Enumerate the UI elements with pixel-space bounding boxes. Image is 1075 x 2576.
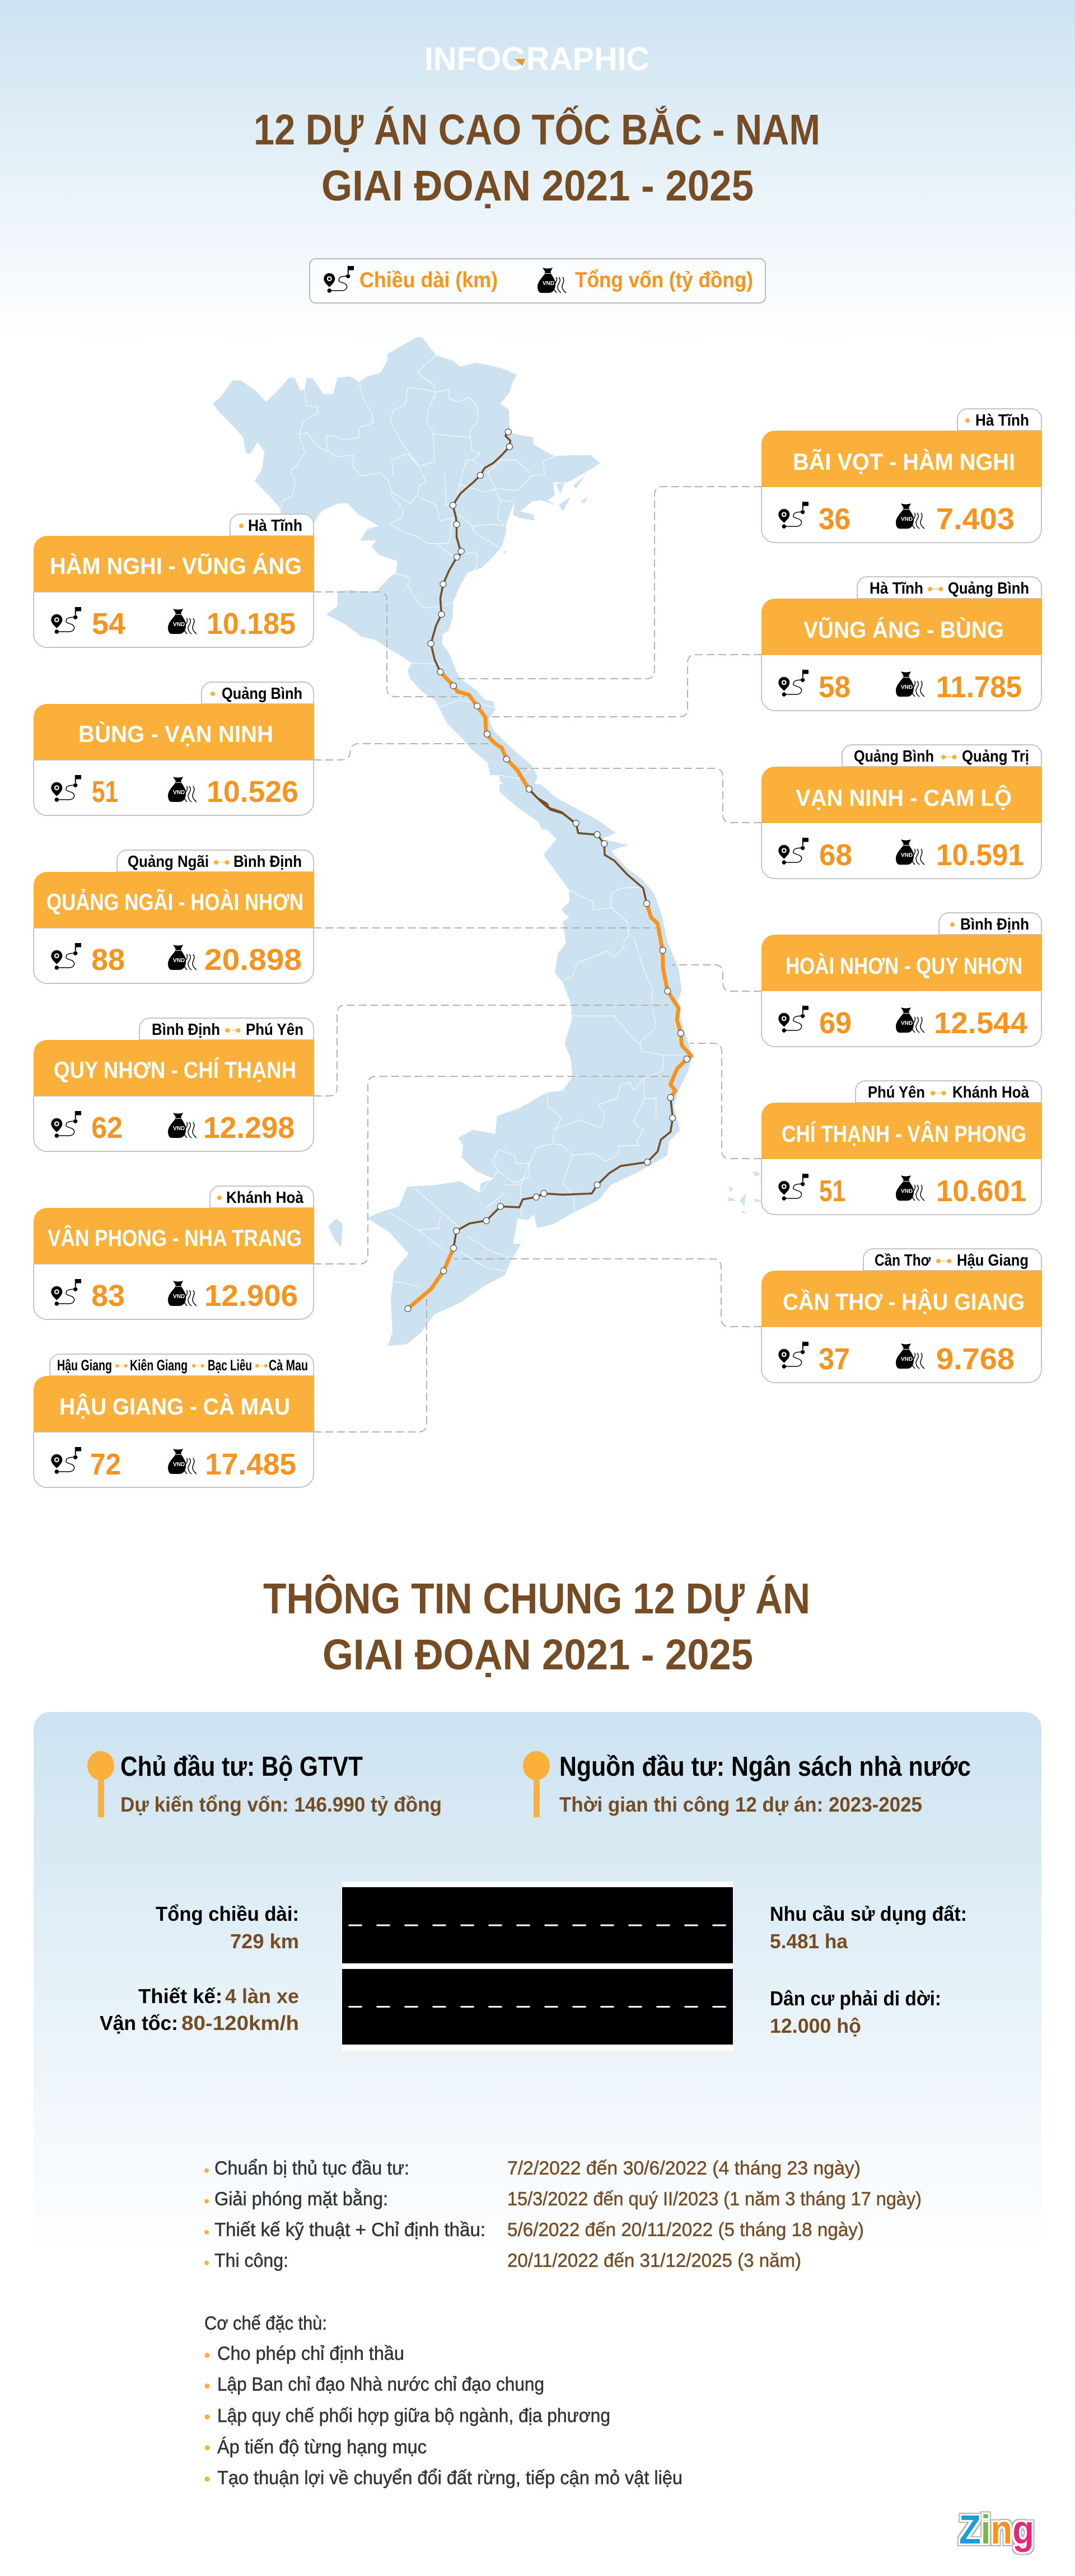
card header	[761, 431, 1042, 487]
card header	[761, 1103, 1042, 1159]
logo: Zing: Zing	[959, 2508, 1034, 2552]
location tab	[50, 1354, 314, 1376]
location tab: Bình Định	[152, 1021, 220, 1039]
capital	[896, 1174, 1026, 1208]
legend label: capital: Tổng vốn (tỷ đồng)	[575, 268, 753, 292]
card body	[761, 991, 1041, 1047]
length	[778, 1342, 850, 1376]
capital: 10.591	[936, 838, 1024, 872]
total capital: Dự kiến tổng vốn: 146.990 tỷ đồng	[120, 1793, 442, 1816]
investor: Chủ đầu tư: Bộ GTVT	[120, 1752, 363, 1782]
card header	[761, 599, 1042, 655]
card body	[761, 823, 1041, 879]
length: 83	[91, 1279, 125, 1313]
length: 36	[819, 502, 850, 536]
residents relocated	[770, 1987, 941, 2037]
capital: VND	[173, 622, 185, 628]
length: 68	[819, 838, 852, 872]
icon: money bag	[538, 268, 566, 293]
map: north	[213, 337, 605, 829]
card: Vân Phong - Nha Trang	[34, 1186, 314, 1319]
land demand: Nhu cầu sử dụng đất:	[770, 1902, 967, 1925]
capital: 12.298	[203, 1111, 295, 1145]
item 2: Lập Ban chỉ đạo Nhà nước chỉ đạo chung	[217, 2374, 544, 2395]
capital	[896, 502, 1015, 536]
card body	[34, 1264, 314, 1319]
length: 51	[819, 1174, 845, 1208]
capital: 10.185	[207, 607, 296, 641]
row: construction	[204, 2250, 801, 2271]
location tab	[139, 1018, 314, 1040]
timeline list	[204, 2158, 922, 2271]
length	[778, 502, 850, 536]
location tab	[957, 409, 1041, 431]
icon: pin 1	[87, 1751, 114, 1817]
card body	[34, 928, 314, 983]
row: technical design: 5/6/2022 đến 20/11/2022 (5 tháng 18 ngày)	[507, 2219, 864, 2241]
legend	[310, 259, 765, 303]
location tab	[857, 577, 1041, 599]
expressway route	[405, 429, 691, 1312]
title: 12 DỰ ÁN CAO TỐC BẮC - NAM	[254, 105, 820, 154]
total length: 729 km	[230, 1930, 299, 1953]
item 1: Cho phép chỉ định thầu	[217, 2343, 404, 2364]
special mechanisms	[204, 2313, 683, 2489]
capital: VND	[901, 516, 913, 522]
card header: VŨNG ÁNG - BÙNG	[803, 616, 1004, 643]
length: 58	[819, 670, 850, 704]
road illustration	[342, 1882, 733, 2051]
length: 37	[819, 1342, 850, 1376]
location tab: Phú Yên	[246, 1021, 303, 1039]
card header: VẠN NINH - CAM LỘ	[796, 784, 1012, 811]
card: Hàm Nghi - Vũng Áng	[34, 514, 314, 647]
length	[51, 1111, 123, 1145]
capital	[168, 943, 302, 977]
location tab: Quảng Bình	[222, 685, 302, 703]
location tab	[856, 1081, 1041, 1103]
location tab: Bình Định	[233, 853, 302, 871]
land demand	[770, 1902, 967, 1953]
card body	[761, 1327, 1041, 1383]
location tab: Hà Tĩnh	[870, 580, 923, 598]
icon: route	[324, 266, 354, 293]
capital: VND	[173, 958, 185, 964]
design and speed: 80-120km/h	[181, 2012, 299, 2034]
location tab	[202, 682, 314, 704]
row: construction: 20/11/2022 đến 31/12/2025 (3 năm)	[507, 2250, 801, 2271]
card header	[34, 872, 314, 928]
card body	[34, 592, 314, 647]
heading: Cơ chế đặc thù:	[204, 2313, 327, 2334]
connector lines	[314, 487, 761, 1432]
card header: HOÀI NHƠN - QUY NHƠN	[786, 953, 1022, 979]
legend label: length: Chiều dài (km)	[359, 268, 498, 292]
location tab: Hà Tĩnh	[248, 517, 302, 535]
length: 69	[819, 1006, 852, 1040]
location tab: Hà Tĩnh	[975, 412, 1029, 430]
title	[254, 105, 820, 210]
length: 51	[92, 775, 118, 809]
location tab	[842, 745, 1041, 767]
location tab: Kiên Giang	[130, 1357, 188, 1374]
row: site clearance	[204, 2188, 922, 2210]
panel background	[34, 1712, 1041, 2243]
length	[51, 775, 118, 809]
capital: 7.403	[936, 502, 1015, 536]
residents relocated: 12.000 hộ	[770, 2014, 861, 2037]
card: Cần Thơ - Hậu Giang	[761, 1249, 1042, 1383]
location tab: Hậu Giang	[57, 1357, 112, 1374]
section heading: GIAI ĐOẠN 2021 - 2025	[322, 1631, 753, 1679]
land demand: 5.481 ha	[770, 1930, 848, 1953]
total length: Tổng chiều dài:	[156, 1902, 299, 1925]
card header: HẬU GIANG - CÀ MAU	[59, 1393, 290, 1420]
location tab: Bình Định	[960, 916, 1029, 934]
location tab: Khánh Hoà	[952, 1084, 1030, 1102]
location tab: Cần Thơ	[875, 1252, 931, 1270]
card header: QUẢNG NGÃI - HOÀI NHƠN	[46, 888, 303, 915]
capital: 17.485	[205, 1448, 296, 1481]
card: Bùng - Vạn Ninh	[34, 682, 314, 815]
card body	[34, 1096, 314, 1151]
capital: 10.526	[207, 775, 298, 809]
location tab: Quảng Trị	[962, 748, 1029, 766]
length	[778, 1006, 852, 1040]
length	[778, 838, 852, 872]
design and speed	[100, 1985, 299, 2034]
length	[778, 1174, 845, 1208]
row: site clearance: Giải phóng mặt bằng:	[214, 2188, 388, 2210]
capital	[896, 1342, 1015, 1376]
capital: VND	[901, 1356, 913, 1362]
icon: pin 2	[523, 1751, 550, 1817]
capital	[896, 670, 1022, 704]
card: Hoài Nhơn - Quy Nhơn	[761, 913, 1042, 1047]
row: construction: Thi công:	[214, 2250, 288, 2271]
length: 62	[91, 1111, 123, 1145]
capital	[168, 607, 296, 641]
row: technical design	[204, 2219, 864, 2241]
card: Quy Nhơn - Chí Thạnh	[34, 1018, 314, 1151]
row: preparation: 7/2/2022 đến 30/6/2022 (4 tháng 23 ngày)	[507, 2158, 861, 2179]
card header	[761, 935, 1042, 991]
card body	[34, 760, 314, 815]
card: Hậu Giang - Cà Mau	[34, 1354, 314, 1487]
title: GIAI ĐOẠN 2021 - 2025	[321, 162, 754, 210]
capital: 12.906	[204, 1279, 298, 1313]
icon: money bag: VND	[543, 281, 554, 287]
design and speed: Vận tốc:	[100, 2012, 178, 2034]
card header: CHÍ THẠNH - VÂN PHONG	[782, 1120, 1026, 1147]
route: north section	[428, 429, 576, 824]
row: preparation	[204, 2158, 861, 2179]
capital: VND	[901, 1020, 913, 1026]
card body	[761, 487, 1041, 543]
card header	[34, 1208, 314, 1264]
location tab	[210, 1186, 314, 1208]
total length	[156, 1902, 299, 1953]
capital: VND	[173, 1126, 185, 1132]
card header	[761, 767, 1042, 823]
row: site clearance: 15/3/2022 đến quý II/2023 (1 năm 3 tháng 17 ngày)	[507, 2188, 922, 2210]
card header: BÃI VỌT - HÀM NGHI	[793, 449, 1015, 475]
construction period: Thời gian thi công 12 dự án: 2023-2025	[559, 1793, 922, 1816]
capital: VND	[173, 790, 185, 796]
location tab: Phú Yên	[868, 1084, 925, 1102]
location tab: Quảng Bình	[948, 580, 1029, 598]
location tab: Cà Mau	[269, 1357, 308, 1374]
location tab	[117, 850, 314, 872]
location tab	[230, 514, 314, 536]
card header: VÂN PHONG - NHA TRANG	[48, 1224, 302, 1251]
header: infographic label: INFOGRAPHIC	[424, 41, 649, 77]
location tab	[863, 1249, 1041, 1271]
card: Chí Thạnh - Vân Phong	[761, 1081, 1042, 1215]
card: Vạn Ninh - Cam Lộ	[761, 745, 1042, 879]
capital: VND	[901, 684, 913, 690]
capital: 20.898	[204, 943, 302, 977]
section heading	[263, 1574, 810, 1679]
funding source: Nguồn đầu tư: Ngân sách nhà nước	[559, 1752, 971, 1782]
length: 88	[91, 943, 125, 977]
card: Vũng Áng - Bùng	[761, 577, 1042, 711]
capital: VND	[173, 1462, 185, 1468]
length: 72	[90, 1448, 121, 1481]
length	[51, 943, 125, 977]
length	[51, 1279, 125, 1313]
page background	[0, 0, 1075, 342]
location tab: Khánh Hoà	[226, 1189, 304, 1207]
card header: HÀM NGHI - VŨNG ÁNG	[50, 552, 302, 579]
section heading: THÔNG TIN CHUNG 12 DỰ ÁN	[263, 1574, 810, 1623]
length	[51, 1447, 121, 1481]
capital: VND	[901, 852, 913, 858]
item 4: Áp tiến độ từng hạng mục	[217, 2437, 427, 2458]
length	[778, 670, 850, 704]
card header	[34, 536, 314, 592]
card header: BÙNG - VẠN NINH	[78, 720, 273, 747]
location tab	[939, 913, 1041, 935]
card: Bãi Vọt - Hàm Nghi	[761, 409, 1042, 543]
design and speed: 4 làn xe	[225, 1985, 299, 2008]
design and speed: Thiết kế:	[138, 1985, 222, 2008]
item 3: Lập quy chế phối hợp giữa bộ ngành, địa phương	[217, 2405, 610, 2426]
capital	[896, 838, 1024, 872]
capital: VND	[173, 1294, 185, 1300]
card header: QUY NHƠN - CHÍ THẠNH	[54, 1057, 296, 1083]
capital: VND	[901, 1188, 913, 1194]
row: preparation: Chuẩn bị thủ tục đầu tư:	[214, 2158, 409, 2179]
card header	[34, 704, 314, 760]
location tab: Quảng Bình	[854, 748, 934, 766]
card header	[34, 1376, 314, 1432]
card body	[34, 1432, 314, 1487]
route: south section	[405, 786, 691, 1312]
card body	[761, 655, 1041, 711]
location tab: Bạc Liêu	[208, 1357, 252, 1374]
card header	[761, 1271, 1042, 1327]
panel: general information	[34, 1712, 1041, 2243]
location tab: Hậu Giang	[957, 1252, 1029, 1270]
item 5: Tạo thuận lợi về chuyển đổi đất rừng, tiếp cận mỏ vật liệu	[217, 2467, 683, 2489]
map of Vietnam	[213, 337, 762, 1346]
length	[51, 607, 125, 641]
capital: 10.601	[936, 1174, 1026, 1208]
residents relocated: Dân cư phải di dời:	[770, 1987, 941, 2010]
capital: 12.544	[934, 1006, 1027, 1040]
card body	[761, 1159, 1041, 1215]
card: Quảng Ngãi - Hoài Nhơn	[34, 850, 314, 983]
location tab: Quảng Ngãi	[128, 853, 209, 871]
card header: CẦN THƠ - HẬU GIANG	[783, 1288, 1025, 1315]
row: technical design: Thiết kế kỹ thuật + Chỉ định thầu:	[214, 2219, 485, 2241]
map: south	[328, 784, 762, 1346]
card header	[34, 1040, 314, 1096]
capital: 11.785	[936, 670, 1022, 704]
capital: 9.768	[936, 1342, 1015, 1376]
length: 54	[92, 607, 125, 641]
